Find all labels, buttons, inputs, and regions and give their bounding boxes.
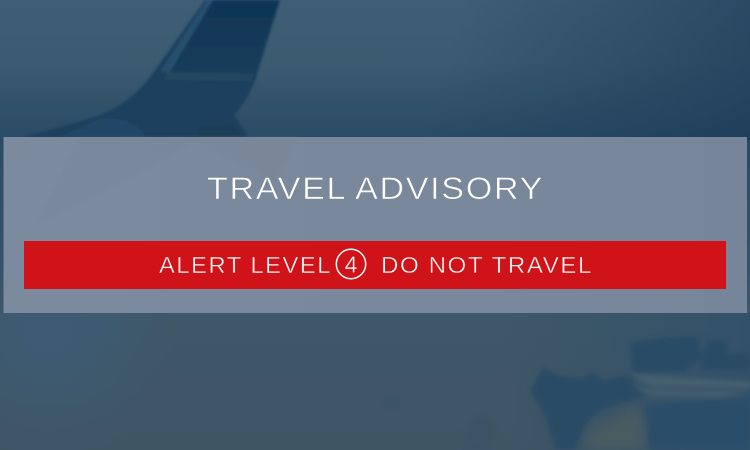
- icon: circled number 4: 4: [345, 252, 358, 278]
- clouds: [530, 338, 750, 450]
- airplane tail fin: [25, 0, 280, 137]
- tail reflection in panel: [35, 137, 300, 225]
- do not travel label: DO NOT TRAVEL: [381, 252, 593, 278]
- panel: advisory: [4, 137, 747, 313]
- alert level label: ALERT LEVEL: [159, 252, 332, 278]
- icon: circled number 4: [336, 249, 366, 279]
- alert banner: [24, 241, 726, 289]
- heading: travel advisory: TRAVEL ADVISORY: [207, 170, 544, 206]
